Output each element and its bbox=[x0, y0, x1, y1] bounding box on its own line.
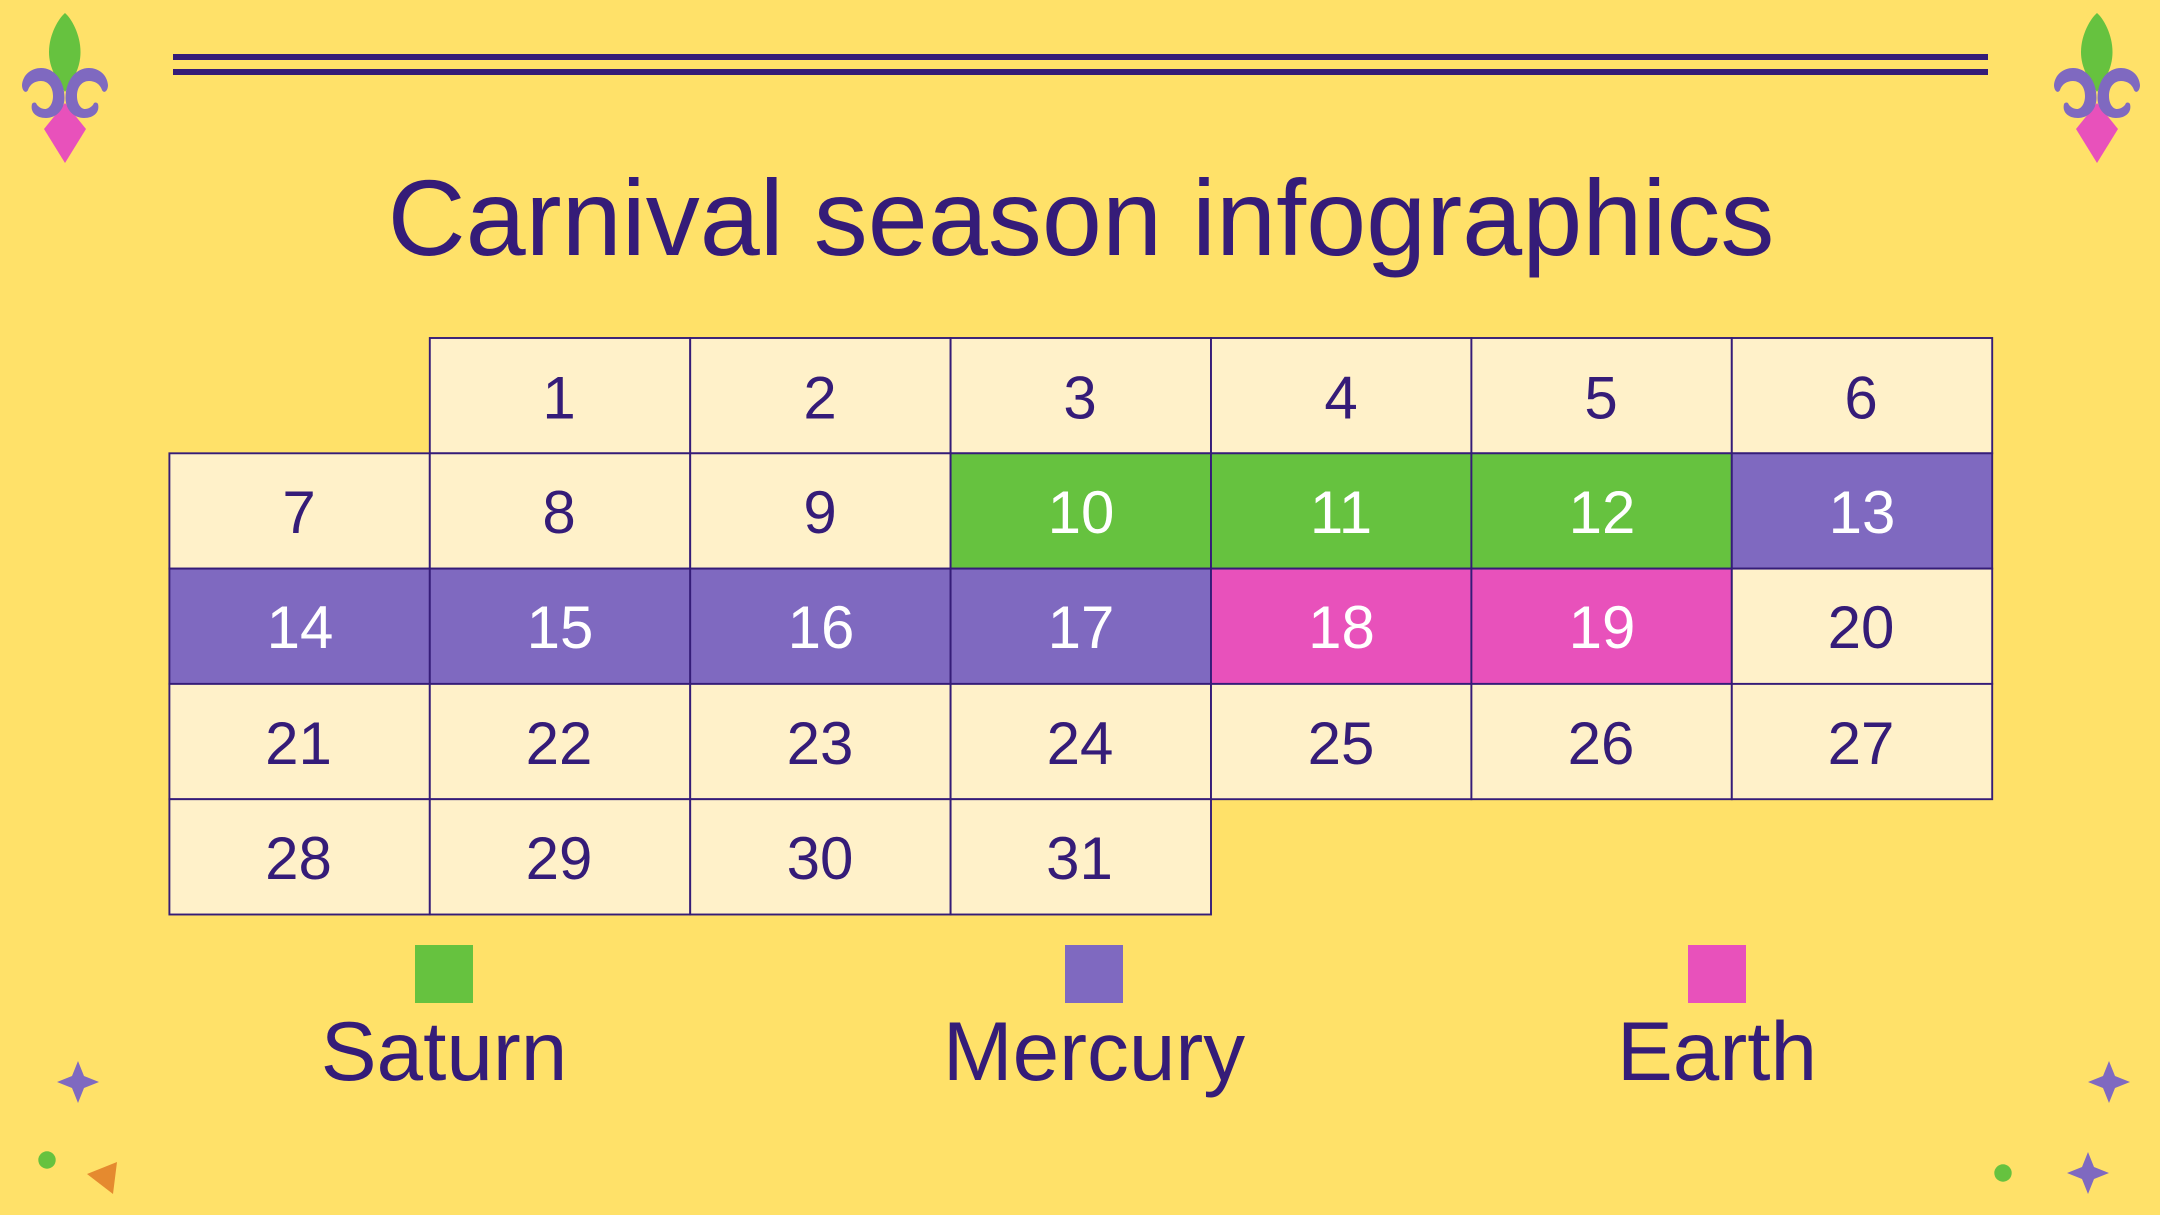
calendar grid: 2 bbox=[803, 364, 837, 432]
calendar grid: 10 bbox=[1048, 479, 1114, 546]
calendar grid: 14 bbox=[267, 594, 333, 661]
calendar grid: 19 bbox=[1569, 594, 1635, 661]
calendar grid: 27 bbox=[1828, 710, 1894, 777]
calendar grid: 26 bbox=[1568, 710, 1634, 777]
calendar grid: 11 bbox=[1310, 479, 1372, 546]
calendar grid: 9 bbox=[803, 479, 837, 546]
calendar grid: 17 bbox=[1048, 594, 1114, 661]
calendar grid: 31 bbox=[1046, 825, 1113, 892]
calendar grid: 21 bbox=[265, 710, 332, 777]
icon: fleur-de-lis left bbox=[22, 13, 108, 163]
calendar grid: 29 bbox=[526, 825, 592, 892]
legend: Mercury bbox=[943, 945, 1245, 1098]
calendar grid: 18 bbox=[1308, 594, 1375, 661]
calendar grid bbox=[169, 338, 1992, 914]
calendar grid: 20 bbox=[1828, 594, 1894, 661]
calendar grid: 5 bbox=[1584, 364, 1618, 432]
legend: Mercury: Mercury bbox=[943, 1004, 1245, 1098]
calendar grid: 12 bbox=[1569, 479, 1635, 546]
legend: Saturn: Saturn bbox=[321, 1004, 567, 1098]
calendar grid: 28 bbox=[265, 825, 332, 892]
icon: green dot bottom left bbox=[38, 1151, 56, 1169]
legend: Earth bbox=[1617, 945, 1817, 1098]
icon: orange triangle bbox=[87, 1162, 117, 1194]
calendar grid: 23 bbox=[787, 710, 853, 777]
calendar grid: 30 bbox=[787, 825, 853, 892]
header double rule bbox=[173, 54, 1988, 75]
calendar grid: 13 bbox=[1829, 479, 1895, 546]
calendar grid: 7 bbox=[282, 479, 316, 546]
calendar grid: 8 bbox=[542, 479, 576, 546]
calendar grid: 25 bbox=[1308, 710, 1374, 777]
calendar grid: 4 bbox=[1324, 364, 1358, 432]
title: Carnival season infographics bbox=[388, 157, 1774, 278]
calendar grid: 15 bbox=[527, 594, 593, 661]
calendar grid: 16 bbox=[788, 594, 854, 661]
icon: star bottom left bbox=[57, 1061, 99, 1103]
calendar grid: 24 bbox=[1047, 710, 1113, 777]
icon: star bottom right bbox=[2067, 1152, 2109, 1194]
calendar grid: 22 bbox=[526, 710, 592, 777]
icon: fleur-de-lis right bbox=[2054, 13, 2140, 163]
icon: star top right bbox=[2088, 1061, 2130, 1103]
icon: green dot bottom right bbox=[1994, 1164, 2012, 1182]
calendar grid: 3 bbox=[1063, 364, 1097, 432]
calendar grid: 6 bbox=[1844, 364, 1878, 432]
legend: Earth: Earth bbox=[1617, 1004, 1817, 1098]
calendar grid: 1 bbox=[542, 364, 576, 432]
legend: Saturn bbox=[321, 945, 567, 1098]
